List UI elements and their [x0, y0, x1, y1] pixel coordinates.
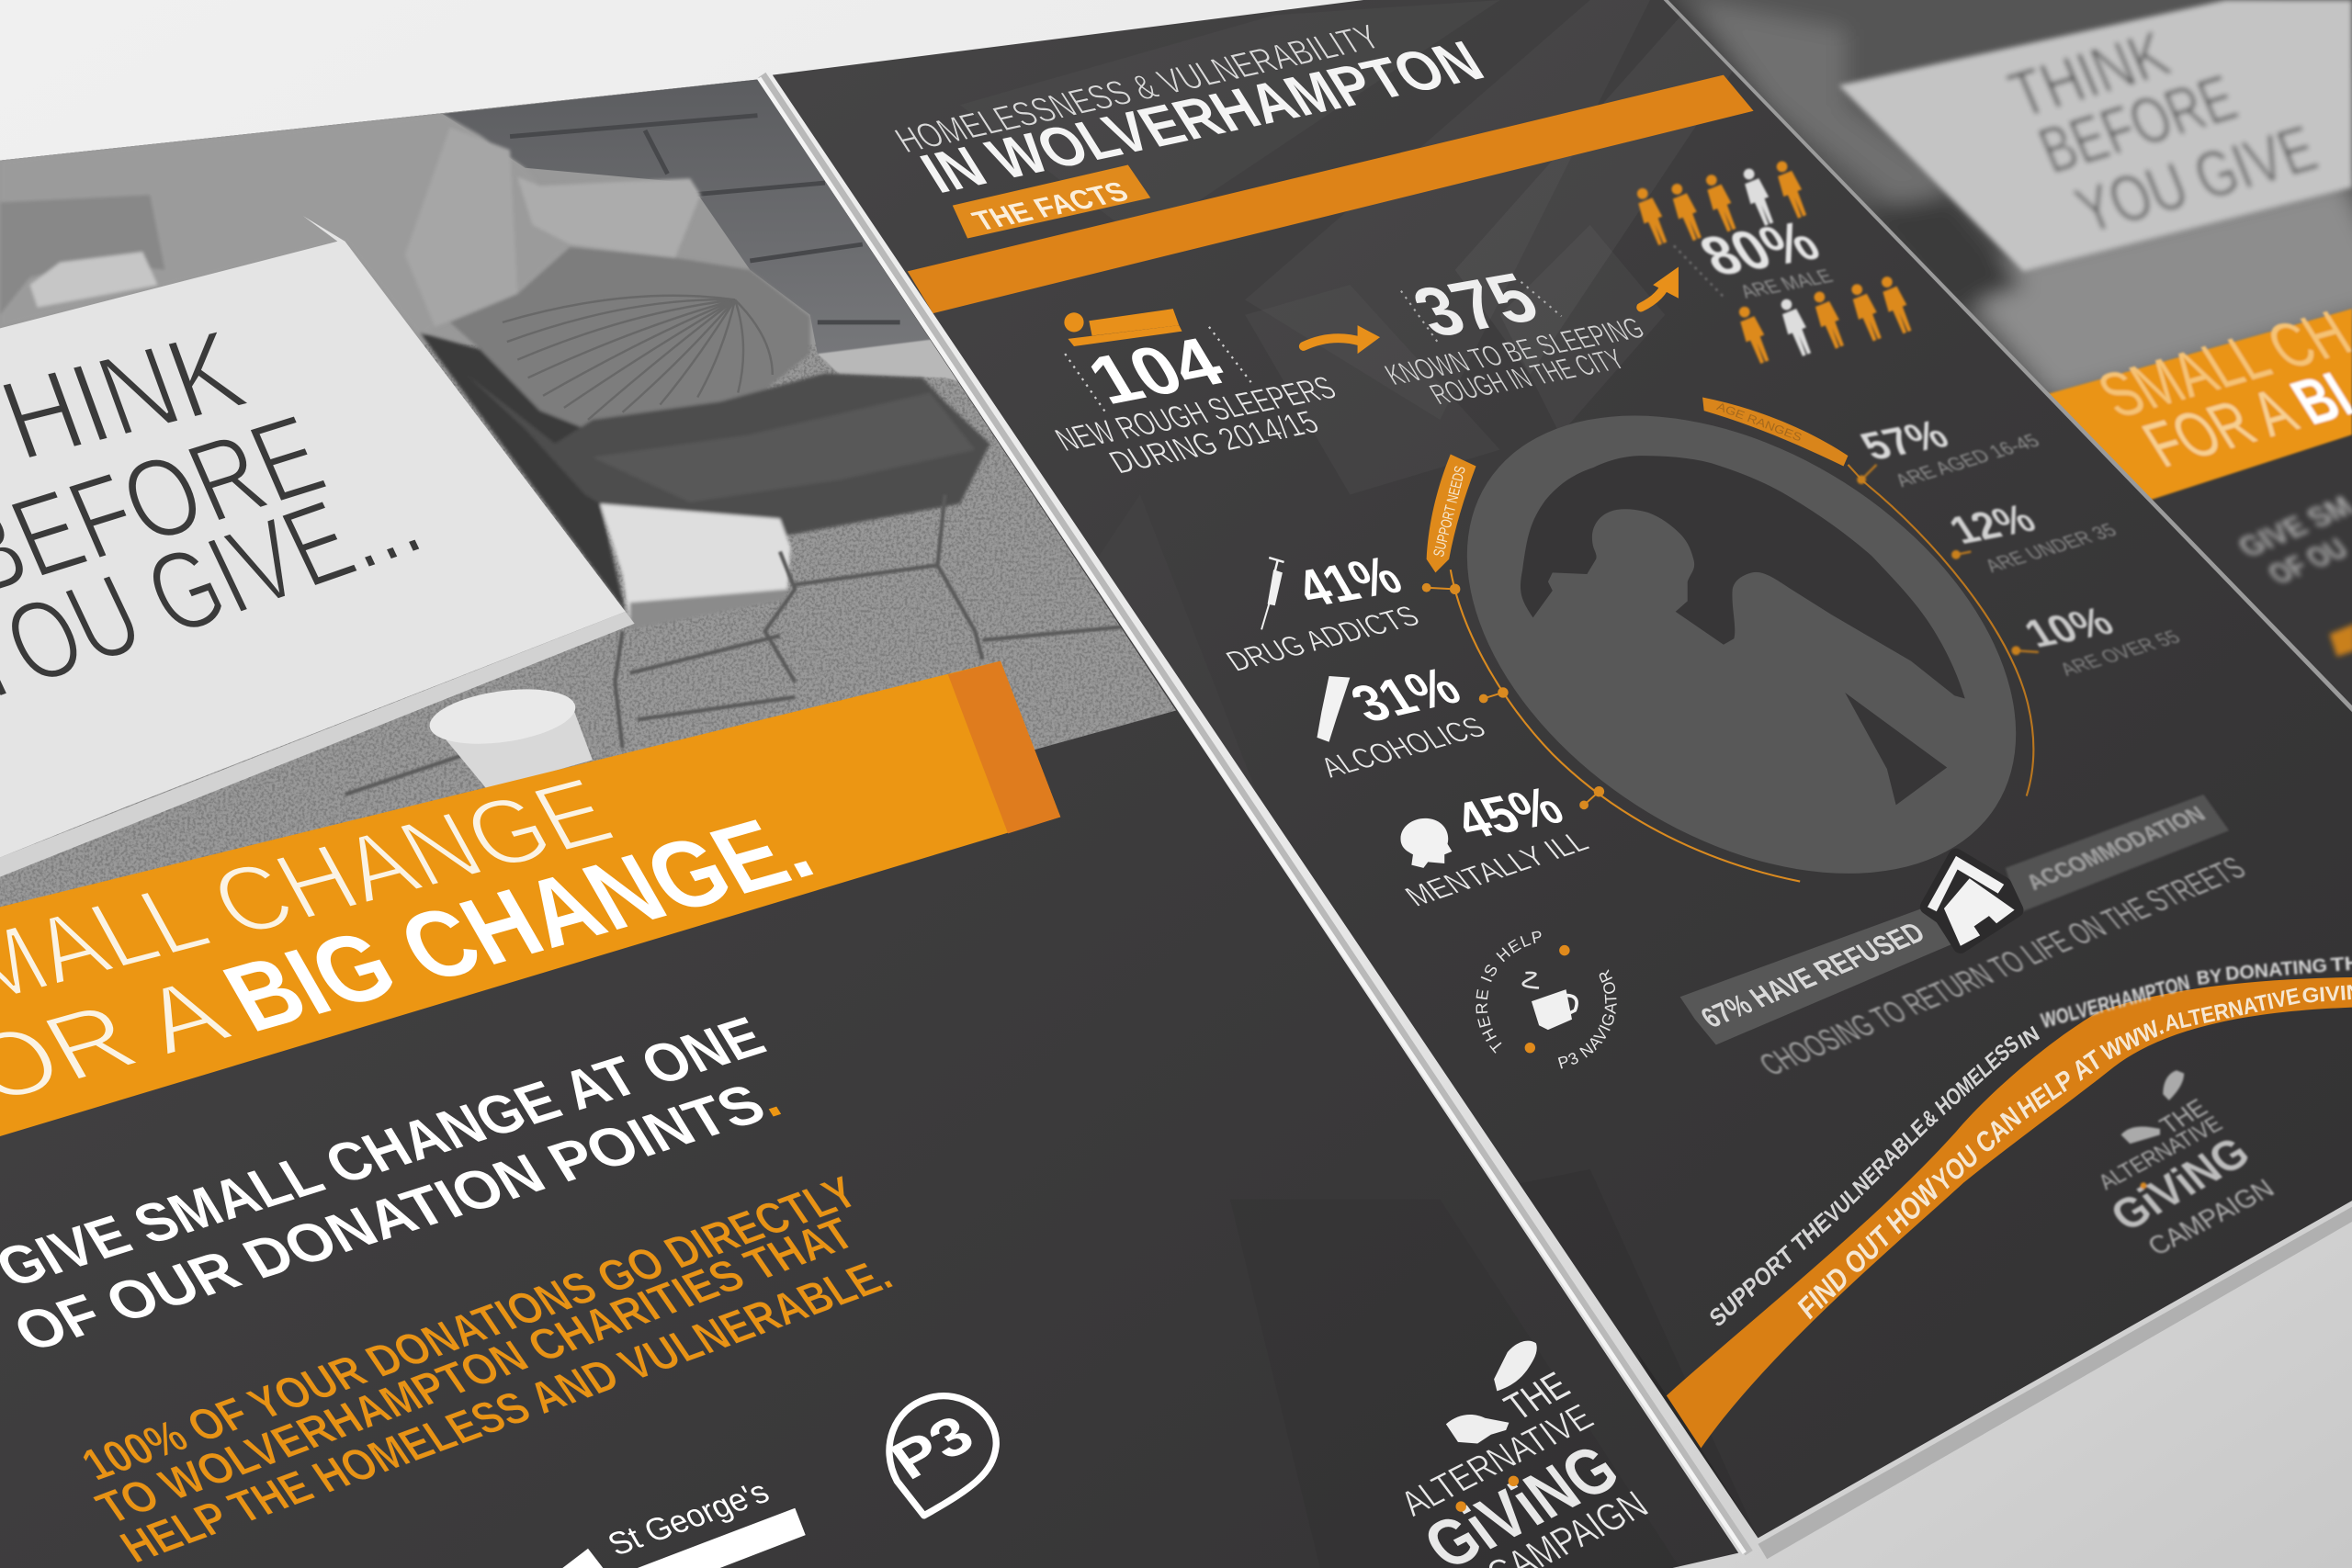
stat: 80% are male with people icons: ARE MALE	[1736, 265, 1837, 302]
stat: 45% mentally ill: MENTALLY ILL	[1398, 826, 1596, 913]
stat: 80% are male with people icons: 80%	[1689, 210, 1831, 288]
ribbon text: support the vulnerable: SUPPORT THE	[1704, 1207, 1836, 1333]
small alternative giving logo, out of focus	[2094, 1070, 2280, 1261]
icon: head	[1400, 818, 1452, 868]
stats: age ranges, out of focus	[1852, 412, 2185, 680]
support needs arc and ribbon	[1427, 454, 1800, 882]
stat: 41% drug addicts	[1220, 546, 1460, 678]
accommodation bar: ACCOMMODATION	[2021, 802, 2211, 895]
age ranges ribbon: AGE RANGES	[1715, 400, 1804, 444]
stat: 31% alcoholics: 31%	[1340, 657, 1471, 733]
dark wedge between arm and body	[1845, 693, 1947, 805]
stat: 104 new rough sleepers: NEW ROUGH SLEEPERS	[1048, 369, 1342, 457]
the facts tag: THE FACTS	[967, 175, 1134, 236]
stat: 104 new rough sleepers	[1048, 309, 1342, 480]
text block: 100% of donations: HELP THE HOMELESS AND VULNERABLE.	[110, 1249, 901, 1568]
stat: 45% mentally ill: 45%	[1443, 776, 1574, 850]
photo: homeless person with cardboard sign	[0, 79, 1176, 908]
blurred circle badge	[2186, 681, 2288, 776]
ribbon text: support the vulnerable: IN	[2014, 1021, 2043, 1054]
text block: 100% of donations: 100% OF YOUR DONATIONS GO DIRECTLY	[72, 1167, 867, 1490]
ribbon text: find out how	[1792, 975, 2352, 1325]
ribbon text: find out how: YOU CAN	[1928, 1100, 2027, 1199]
icon: house	[1928, 856, 2016, 946]
ribbon text: support the vulnerable: VULNERABLE	[1821, 1114, 1932, 1229]
stat: 375 known	[1384, 274, 1644, 404]
cardboard sign	[0, 216, 635, 877]
handwritten: think before you give	[0, 307, 438, 727]
orange header band	[908, 75, 1754, 313]
stat: 10% over 55: 10%	[2016, 600, 2121, 656]
ribbon text: find out how: WWW.	[2097, 1012, 2167, 1066]
stat: 12% under 35: 12%	[1940, 497, 2043, 552]
stat: 12% under 35: ARE UNDER 35	[1980, 519, 2121, 576]
stat: 57% aged 16-45	[1852, 412, 2044, 491]
icon: bottle	[1317, 676, 1350, 742]
67% refused accommodation ribbon	[1680, 795, 2253, 1082]
logo: P3	[879, 1396, 996, 1516]
panel: center infographic poster	[773, 0, 2352, 1538]
orange headline banner	[0, 661, 1060, 1140]
orange curved call-to-action ribbon	[1667, 952, 2352, 1448]
small alternative giving logo, out of focus: ALTERNATIVE	[2094, 1112, 2227, 1195]
stat: 12% under 35	[1940, 497, 2121, 576]
text block: 100% of donations: TO WOLVERHAMPTON CHARITIES THAT	[86, 1208, 864, 1533]
logo: alternative giving campaign: THE	[1497, 1364, 1578, 1428]
ribbon text: support the vulnerable: DONATING	[2224, 955, 2328, 985]
central circle with homeless silhouette	[1466, 415, 2016, 874]
stat: 10% over 55: ARE OVER 55	[2055, 626, 2185, 680]
stat: 104 new rough sleepers: 104	[1073, 323, 1238, 419]
P3 navigator circular badge: P3 NAVIGATOR	[1558, 969, 1617, 1069]
stat: 41% drug addicts: DRUG ADDICTS	[1220, 600, 1426, 678]
blurred cardboard sign: THINK	[1999, 17, 2180, 132]
headline: big change: BIG CHANGE.	[207, 793, 831, 1053]
ribbon text: support the vulnerable: & HOMELESS	[1917, 1031, 2024, 1134]
small alternative giving logo, out of focus: CAMPAIGN	[2143, 1174, 2280, 1261]
title: IN WOLVERHAMPTON	[909, 28, 1495, 205]
icon: syringe	[1261, 558, 1284, 629]
small alternative giving logo, out of focus: THE	[2154, 1094, 2213, 1139]
stat: 375 known: KNOWN TO BE SLEEPING	[1379, 311, 1651, 391]
refused bar: 67% HAVE REFUSED	[1694, 917, 1932, 1034]
ribbon text: find out how: HELP AT	[2013, 1044, 2107, 1125]
center poster edge highlights	[759, 0, 2352, 1559]
ribbon text: support the vulnerable	[1704, 952, 2352, 1333]
stat: 80% are male with people icons	[1632, 158, 1917, 366]
arrow to 80%	[1641, 266, 1679, 308]
panel: right poster, out of focus	[1668, 0, 2352, 705]
ribbon text: support the vulnerable: WOLVERHAMPTON	[2039, 970, 2192, 1032]
stat: 45% mentally ill	[1398, 776, 1604, 913]
left poster dark body	[0, 79, 1738, 1568]
icon: coffee cup	[1523, 973, 1577, 1030]
P3 navigator circular badge	[1476, 931, 1617, 1069]
icon row: people top	[1632, 158, 1811, 247]
stat: 375 known: 375	[1400, 259, 1552, 352]
ribbon text: find out how: FIND OUT HOW	[1792, 1172, 1945, 1325]
stat: 375 known: ROUGH IN THE CITY	[1424, 343, 1631, 412]
age ranges arc and ribbon	[1702, 397, 2033, 796]
blurred cardboard sign	[1839, 0, 2352, 271]
stat: 31% alcoholics: ALCOHOLICS	[1314, 711, 1492, 784]
support needs ribbon: SUPPORT NEEDS	[1430, 464, 1469, 558]
support needs ribbon	[1427, 454, 1476, 572]
arrow to 375	[1304, 325, 1380, 354]
stat: 41% drug addicts: 41%	[1285, 546, 1412, 618]
ribbon text: support the vulnerable: BY	[2196, 965, 2223, 989]
small alternative giving logo, out of focus: GiViNG	[2101, 1128, 2259, 1240]
stat: 10% over 55	[2011, 600, 2185, 680]
center poster background	[750, 0, 2352, 1568]
P3 navigator circular badge: THERE IS HELP	[1476, 931, 1542, 1054]
blurred orange banner	[2041, 298, 2352, 503]
refused bar	[1680, 907, 1951, 1044]
logo: St George's	[562, 1473, 806, 1568]
stat: 31% alcoholics	[1314, 657, 1509, 784]
dark sky area around silhouette	[1521, 456, 1965, 698]
logo: St George's: St George's	[601, 1473, 775, 1562]
logo: alternative giving campaign: ALTERNATIVE	[1393, 1396, 1601, 1524]
stat: 57% aged 16-45: ARE AGED 16-45	[1890, 430, 2044, 491]
icon row: people bottom	[1734, 274, 1917, 366]
logo: alternative giving campaign	[1393, 1341, 1657, 1568]
text block: give small change: OF OUR DONATION POINTS.	[3, 1068, 792, 1363]
icon: sleeping person	[1064, 309, 1182, 346]
stat: 57% aged 16-45: 57%	[1852, 412, 1957, 468]
logo: P3: P3	[879, 1404, 985, 1491]
age ranges ribbon	[1702, 397, 1848, 467]
panel: left poster	[0, 60, 1738, 1568]
blurred cardboard sign: BEFORE	[2029, 62, 2247, 187]
stat: 104 new rough sleepers: DURING 2014/15	[1102, 403, 1326, 480]
ribbon text: find out how: ALTERNATIVE	[2162, 984, 2302, 1037]
blurred body copy	[2232, 491, 2352, 657]
text block: give small change: GIVE SMALL CHANGE AT ONE	[0, 1006, 776, 1299]
paper cup	[426, 681, 593, 790]
